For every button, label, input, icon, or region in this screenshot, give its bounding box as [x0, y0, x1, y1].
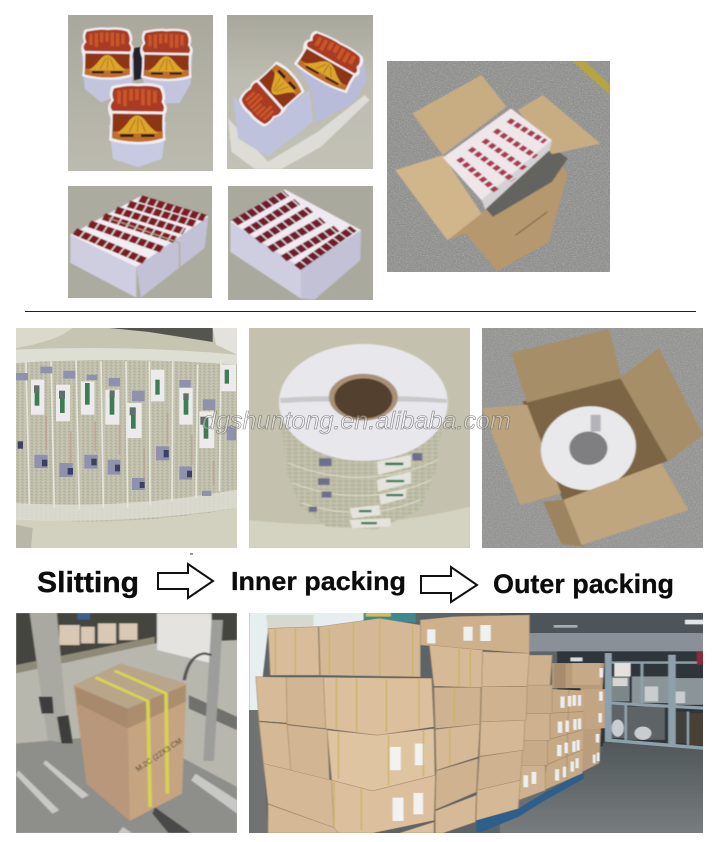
photo: three stacks of shield labels	[68, 15, 213, 171]
far carton stack	[544, 663, 605, 790]
warehouse background	[500, 613, 705, 833]
middle carton stacks	[420, 615, 552, 833]
photo: two wrapped stacks of shield labels	[227, 15, 373, 169]
step: slitting: Slitting	[37, 567, 139, 599]
step: outer packing: Outer packing	[493, 569, 674, 599]
photo: flat label stack with horizontal rows	[68, 186, 212, 298]
divider line	[25, 311, 696, 312]
arrow: slitting to inner packing	[158, 564, 213, 598]
arrow: inner packing to outer packing	[421, 567, 477, 602]
photo: carton with wrapped roll on gravel floor	[482, 328, 703, 548]
left wall	[249, 613, 364, 710]
front carton stack	[256, 618, 435, 833]
photo: slitting roll close-up	[16, 328, 237, 548]
step: inner packing: Inner packing	[231, 566, 406, 596]
watermark: dgshuntong.en.alibaba.com	[202, 407, 511, 435]
photo: strapping carton on machine: M.2C (22X3 CM	[134, 736, 184, 774]
photo: inner packing label roll	[249, 328, 470, 548]
photo: warehouse with stacked cartons	[249, 613, 703, 833]
photo: flat label stack with diagonal rows	[228, 186, 373, 300]
photo: open carton with label stack on gravel floor	[387, 61, 610, 272]
photo: strapping carton on machine	[16, 613, 237, 833]
